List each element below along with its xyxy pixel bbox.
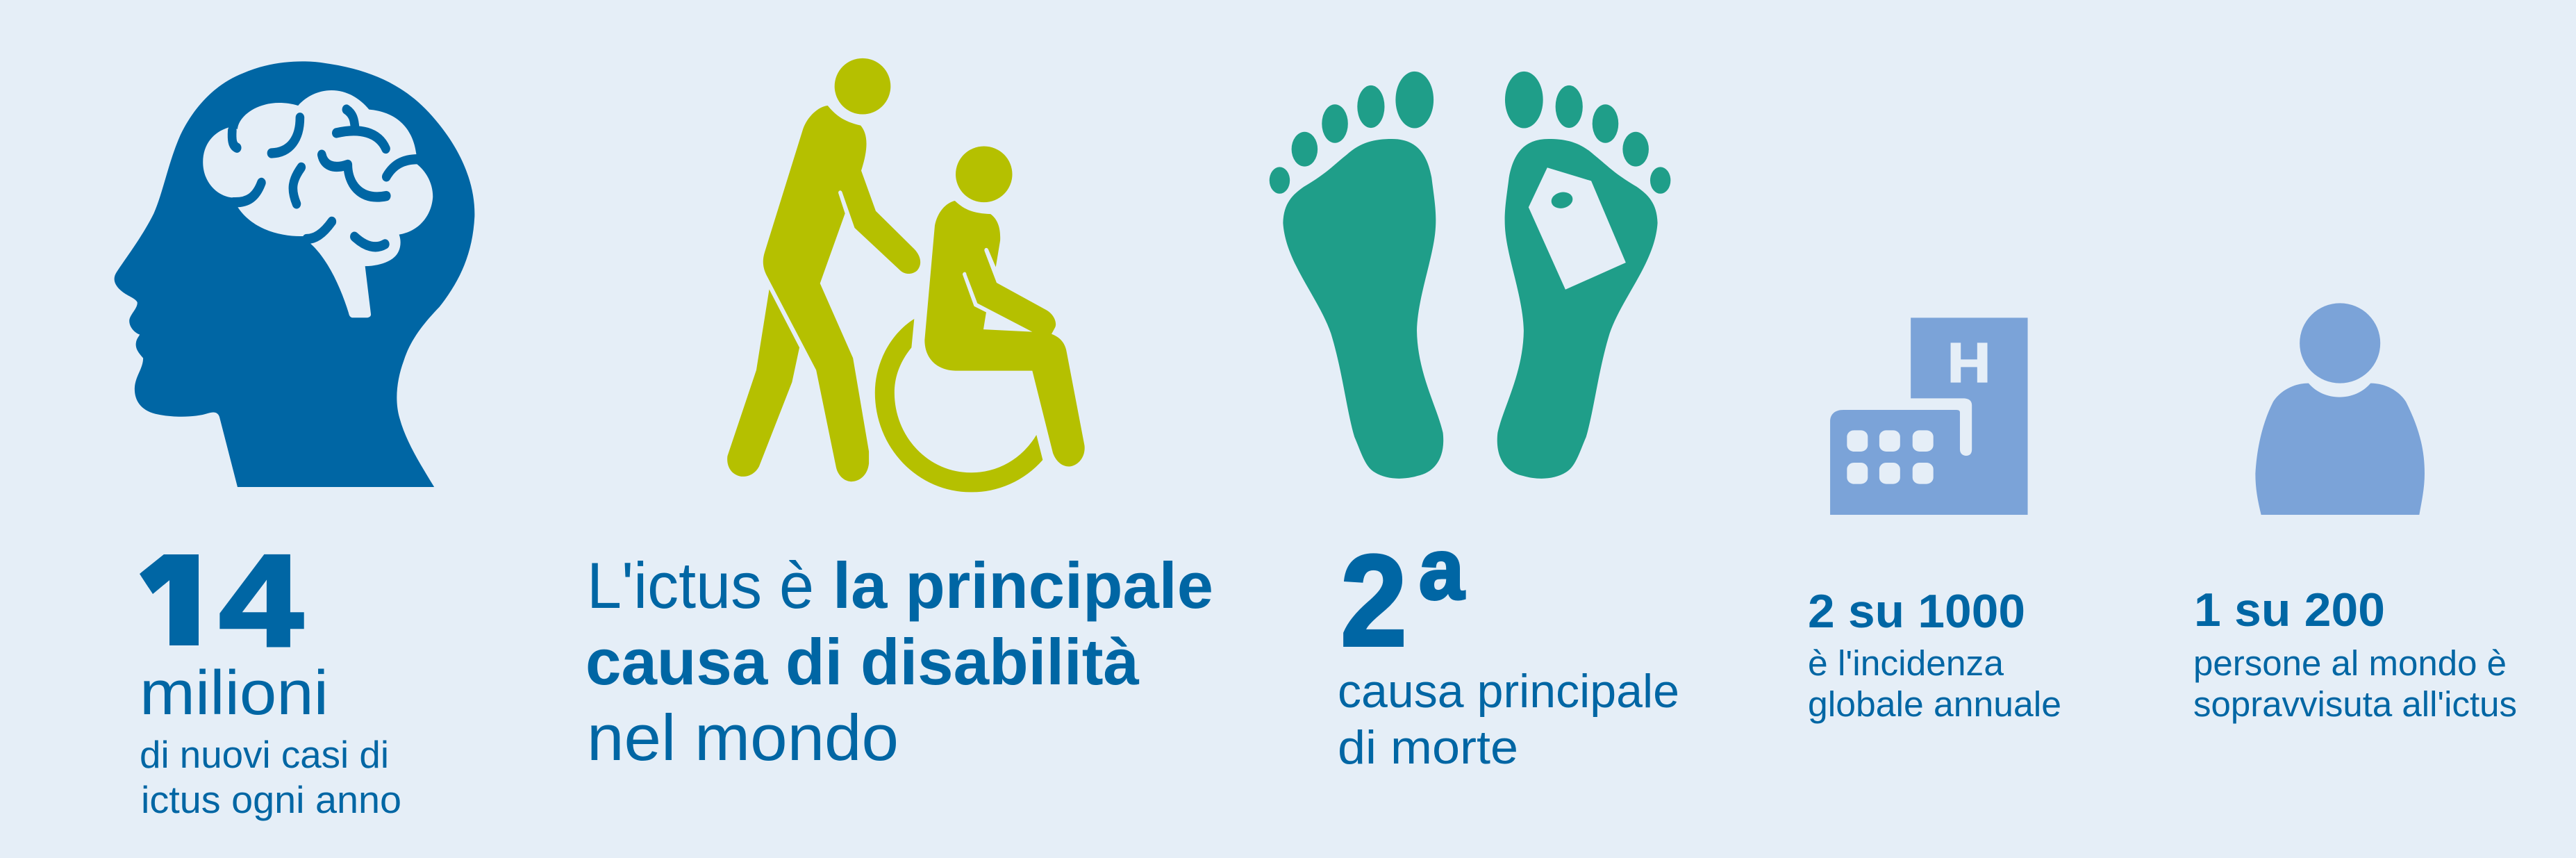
- big number: 14: 4: [219, 528, 303, 673]
- big number: 14: 1: [136, 528, 213, 673]
- description: cause of death: causa principale: [1338, 665, 1679, 718]
- big number: 2a: 2: [1340, 528, 1407, 673]
- text block: 1 su 200: sopravvisuta all'ictus: [2193, 684, 2517, 724]
- icon: person pushing wheelchair: [727, 58, 1085, 492]
- icon: feet with toe tag: [1270, 72, 1670, 479]
- text block: 1 su 200: persone al mondo è: [2193, 643, 2507, 683]
- big number: 2a: a: [1419, 522, 1465, 618]
- text block: 1 su 200: 1 su 200: [2194, 584, 2385, 636]
- text block: main cause of disability: la principale: [833, 549, 1213, 622]
- text block: 2 su 1000: [1808, 585, 2061, 724]
- text block: 1 su 200: [2193, 584, 2517, 724]
- text block: main cause of disability: causa di disabilità: [585, 625, 1140, 698]
- text block: main cause of disability: [585, 549, 1213, 774]
- description: cause of death: [1338, 665, 1679, 774]
- description: new cases: [140, 733, 401, 821]
- icon: head with brain: [115, 61, 474, 487]
- text block: 14 milioni: [140, 554, 400, 821]
- text block: 2 su 1000: è l'incidenza: [1808, 643, 2004, 683]
- icon: hospital: [1830, 317, 2028, 515]
- text block: 2 su 1000: 2 su 1000: [1808, 585, 2025, 638]
- description: new cases: ictus ogni anno: [141, 778, 401, 821]
- text block: 2 su 1000: globale annuale: [1808, 684, 2061, 724]
- text block: main cause of disability: L'ictus è: [587, 549, 814, 622]
- text block: main cause of disability: nel mondo: [587, 701, 899, 774]
- description: new cases: di nuovi casi di: [140, 733, 389, 776]
- big number: 14: [140, 554, 304, 647]
- icon: person: [2255, 303, 2425, 515]
- big number: 2a: [1340, 522, 1465, 673]
- text block: second cause of death: [1338, 522, 1679, 774]
- description: cause of death: di morte: [1338, 721, 1518, 774]
- label: milioni: milioni: [140, 659, 329, 728]
